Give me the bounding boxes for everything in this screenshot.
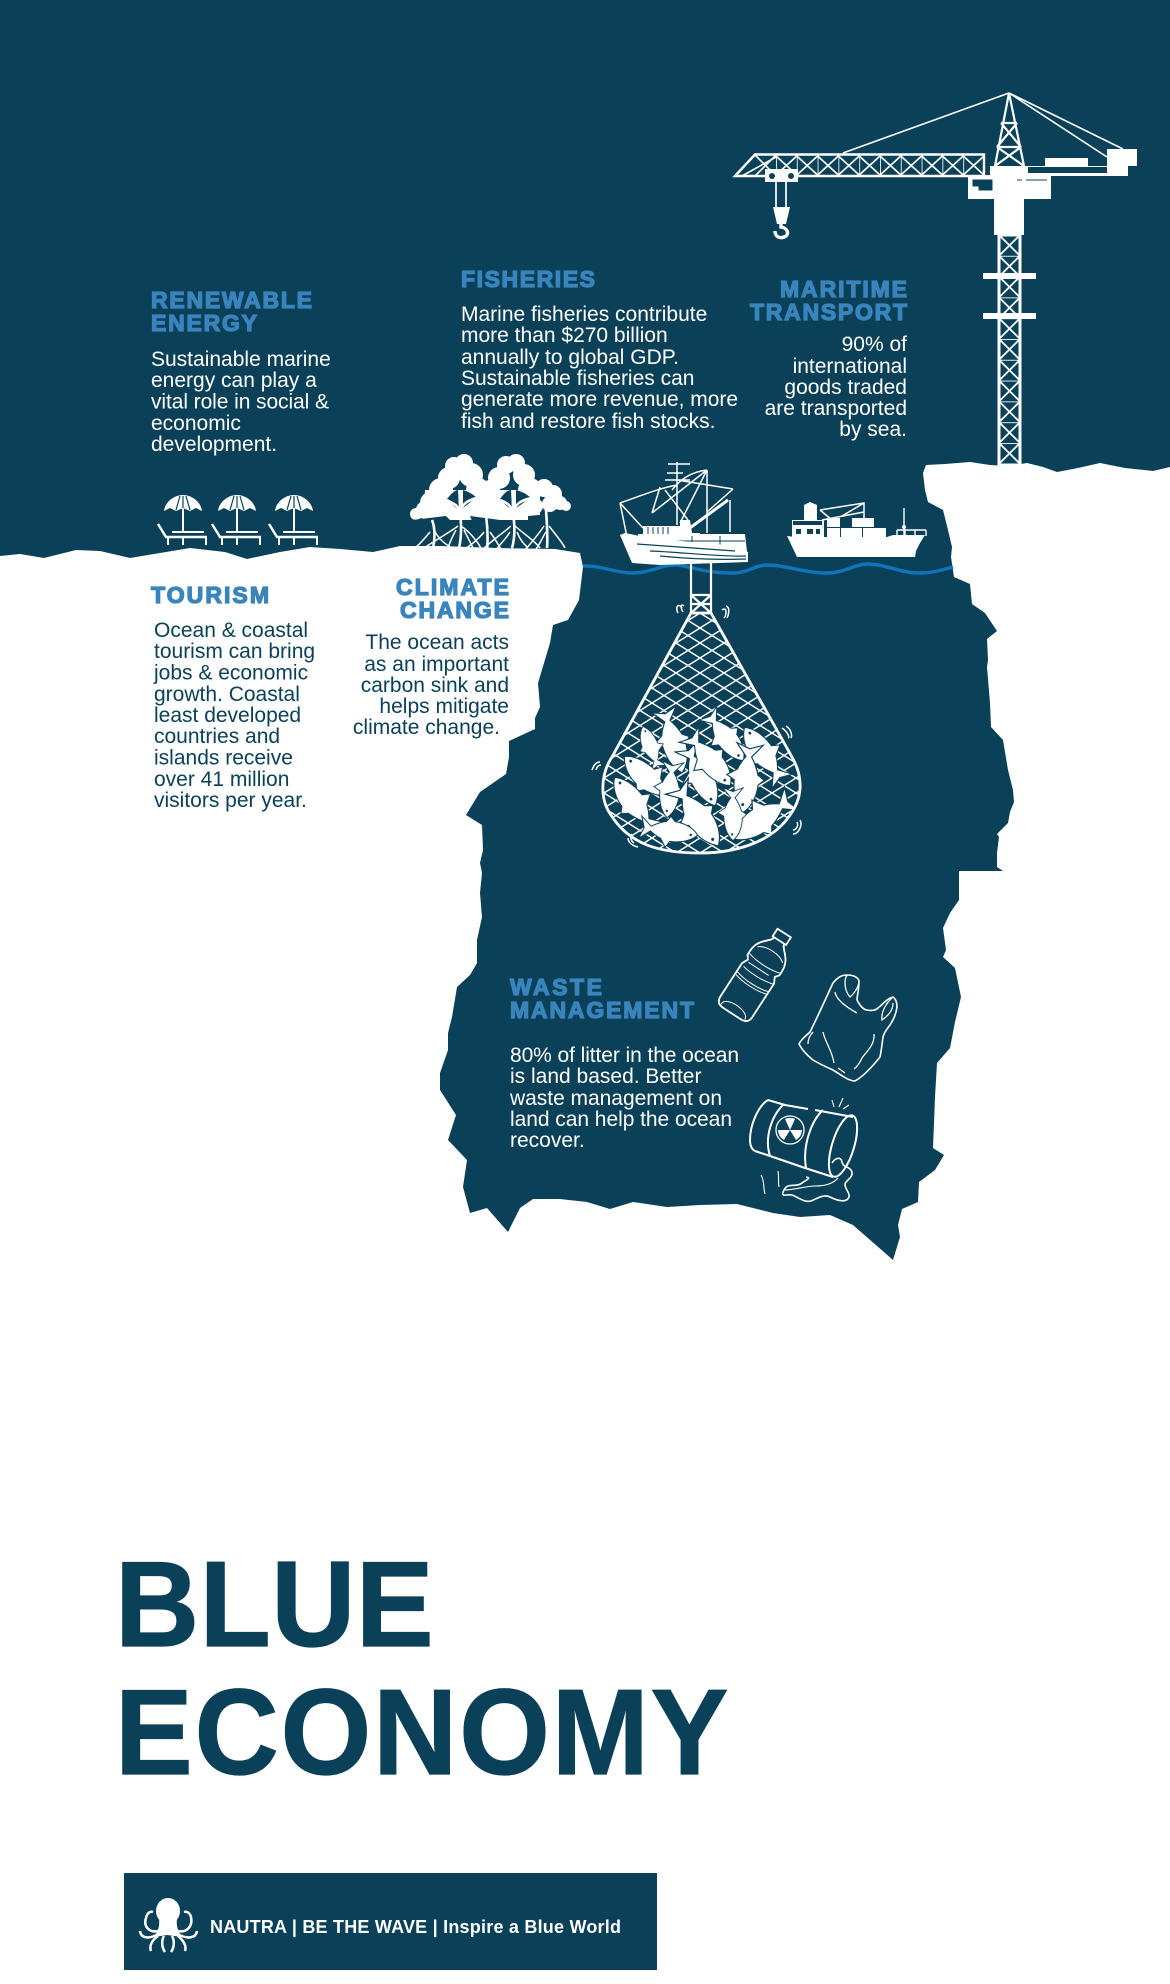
text: renewable energy: economic [151, 412, 241, 435]
heading: climate change: CHANGE [400, 597, 509, 623]
title [115, 1537, 730, 1801]
panel: renewable energy [151, 287, 331, 456]
text: maritime transport: 90% of [842, 333, 907, 356]
panel: waste management [509, 974, 739, 1152]
crane cross bars [983, 273, 1036, 319]
text: fisheries: fish and restore fish stocks. [461, 410, 715, 433]
text: climate change: as an important [364, 653, 509, 676]
text: climate change: The ocean acts [365, 631, 509, 654]
title: ECONOMY [115, 1665, 730, 1801]
crane trolley [765, 169, 798, 182]
icon: mangrove trees [410, 454, 572, 552]
boat rigging [620, 462, 733, 537]
text: waste management: waste management on [509, 1087, 722, 1110]
tree canopy [410, 454, 571, 521]
text: waste management: is land based. Better [510, 1065, 701, 1088]
footer text: NAUTRA | BE THE WAVE | Inspire a Blue World [210, 1917, 621, 1937]
net rope [691, 563, 711, 613]
crane cables [843, 93, 1123, 157]
heading: waste management: WASTE [510, 974, 602, 1000]
crane mast [999, 235, 1020, 465]
net outline [603, 613, 800, 853]
icon: tower crane [735, 93, 1137, 465]
text: tourism: Ocean & coastal [154, 619, 308, 642]
text: waste management [509, 1044, 739, 1152]
text: renewable energy: development. [151, 433, 277, 456]
text: tourism: visitors per year. [154, 789, 307, 812]
text: waste management: land can help the ocean [510, 1108, 732, 1131]
text: tourism: over 41 million [154, 768, 289, 791]
text: tourism: tourism can bring [154, 640, 315, 663]
heading: renewable energy: RENEWABLE [151, 287, 312, 313]
fish catch [613, 704, 794, 848]
text: climate change: helps mitigate [379, 695, 509, 718]
boat hull [620, 533, 748, 565]
icon: plastic bottle [716, 923, 800, 1024]
heading: renewable energy [151, 287, 312, 336]
text: tourism: growth. Coastal [154, 683, 300, 706]
text: tourism: least developed [154, 704, 301, 727]
text: climate change: climate change. [353, 716, 500, 739]
text: fisheries: more than $270 billion [461, 324, 668, 347]
heading: fisheries: FISHERIES [461, 266, 595, 292]
heading: maritime transport: MARITIME [780, 276, 907, 302]
tree trunks and roots [432, 490, 547, 552]
icon: fishing net with fish [592, 563, 805, 856]
text: fisheries: Marine fisheries contribute [461, 303, 707, 326]
heading: maritime transport [750, 276, 907, 325]
net motion marks [592, 605, 801, 847]
heading: climate change: CLIMATE [396, 574, 509, 600]
panel: tourism [151, 582, 315, 812]
text: tourism [153, 619, 315, 812]
icon: spilled radioactive barrel [750, 1098, 863, 1201]
text: fisheries: annually to global GDP. [461, 346, 679, 369]
text: waste management: 80% of litter in the ocean [510, 1044, 739, 1067]
panel: maritime transport [750, 276, 907, 441]
crane cab block [968, 166, 1128, 235]
heading: maritime transport: TRANSPORT [750, 299, 907, 325]
crane top tower [995, 93, 1024, 166]
icon: fishing boat [620, 462, 748, 565]
ocean background shape [0, 0, 1170, 1260]
heading: waste management: MANAGEMENT [510, 997, 694, 1023]
text: renewable energy [151, 348, 331, 456]
footer bar [124, 1873, 657, 1970]
text: maritime transport: goods traded [784, 376, 907, 399]
text: fisheries: Sustainable fisheries can [461, 367, 694, 390]
heading: climate change [396, 574, 509, 623]
text: maritime transport: by sea. [839, 418, 907, 441]
heading: renewable energy: ENERGY [151, 310, 257, 336]
text: tourism: islands receive [154, 746, 293, 770]
icon: octopus logo [140, 1898, 197, 1952]
text: maritime transport: international [793, 355, 907, 378]
icon: cargo ship [787, 502, 926, 557]
text: renewable energy: vital role in social & [151, 390, 329, 414]
text: climate change: carbon sink and [361, 674, 509, 697]
text: renewable energy: energy can play a [151, 369, 317, 392]
panel: fisheries [461, 266, 738, 433]
crane jib [776, 155, 984, 176]
water line [583, 564, 953, 573]
crane hook [776, 182, 786, 207]
title: BLUE [115, 1537, 434, 1673]
heading: tourism: TOURISM [151, 582, 269, 608]
text: fisheries [461, 303, 738, 433]
text: renewable energy: Sustainable marine [151, 348, 331, 371]
icon: beach umbrellas and loungers [158, 495, 318, 545]
net mesh [600, 610, 805, 855]
boat cabin [638, 520, 747, 552]
canopy hollows [412, 490, 572, 526]
icon: plastic bag [799, 975, 897, 1081]
text: fisheries: generate more revenue, more [461, 388, 738, 411]
text: tourism: jobs & economic [153, 662, 308, 684]
heading: waste management [510, 974, 694, 1023]
text: maritime transport: are transported [765, 397, 907, 420]
text: climate change [353, 631, 509, 739]
panel: climate change [353, 574, 509, 739]
text: tourism: countries and [154, 725, 280, 748]
text: maritime transport [765, 333, 907, 441]
text: waste management: recover. [510, 1129, 585, 1152]
